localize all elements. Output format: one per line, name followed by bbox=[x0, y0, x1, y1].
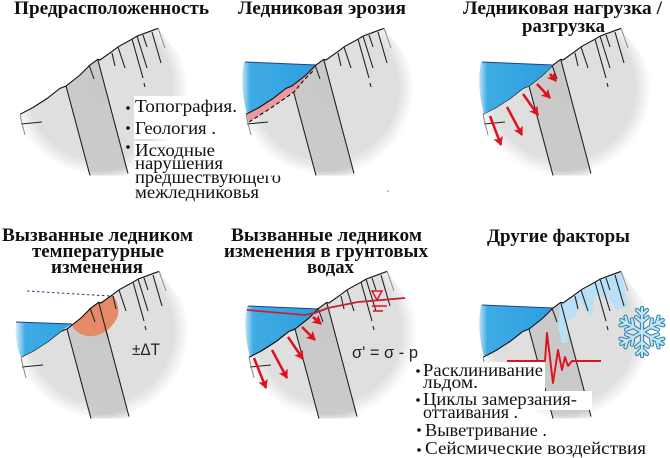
bullet list: other factors bbox=[416, 360, 646, 458]
title: temperature changes: изменения bbox=[51, 258, 143, 278]
panel: glacial erosion bbox=[238, 0, 416, 180]
panel: predisposition bbox=[14, 0, 281, 202]
slope diagram: groundwater changes bbox=[245, 271, 419, 423]
slope diagram: glacial erosion bbox=[242, 28, 416, 180]
panel: glacial loading bbox=[463, 0, 663, 180]
bullet list: predisposition: Геология . bbox=[135, 118, 216, 138]
bullet list: other factors: Циклы замерзания- bbox=[423, 389, 577, 409]
bullet list: other factors: Расклинивание bbox=[423, 360, 543, 380]
bullet list: predisposition: нарушения bbox=[135, 153, 223, 173]
text background patches bbox=[415, 362, 592, 420]
panel: temperature changes bbox=[2, 226, 193, 423]
bullet list: predisposition: Исходные bbox=[135, 140, 215, 160]
dotted former ice surface bbox=[27, 291, 110, 296]
text background patches bbox=[134, 96, 240, 200]
icon: snowflake bbox=[618, 308, 666, 356]
red stress arrows bbox=[490, 74, 556, 145]
bullet list: predisposition: межледниковья bbox=[135, 182, 259, 202]
slope diagram: glacial loading bbox=[479, 28, 653, 180]
title: glacial loading: разгрузка bbox=[522, 17, 605, 37]
panel: groundwater changes bbox=[224, 226, 429, 423]
bullet list: predisposition: Топография. bbox=[135, 96, 237, 116]
title: other factors: Другие факторы bbox=[487, 227, 630, 247]
title: temperature changes: Вызванные ледником bbox=[2, 226, 193, 246]
slope fractures bbox=[483, 271, 628, 418]
label: effective stress equation: σ' = σ - p bbox=[352, 343, 418, 362]
red stress arrows bbox=[254, 317, 321, 388]
water table line bbox=[247, 298, 405, 315]
frost zone bbox=[558, 271, 628, 343]
title: groundwater changes: изменения в грунтовых bbox=[224, 242, 429, 262]
panel: other factors bbox=[415, 227, 666, 458]
slope diagram: temperature changes bbox=[16, 271, 191, 423]
slope diagram: predisposition bbox=[20, 28, 190, 180]
bullet list: other factors: льдом. bbox=[423, 372, 478, 392]
title: groundwater changes: водах bbox=[307, 258, 355, 278]
bullet list: other factors: оттаивания . bbox=[423, 402, 518, 422]
bullet list: other factors: Сейсмические воздействия bbox=[425, 438, 646, 458]
title: groundwater changes bbox=[224, 226, 429, 278]
bullet list: predisposition bbox=[126, 96, 281, 202]
water table symbol bbox=[372, 291, 387, 311]
bullet list: predisposition: предшествующего bbox=[135, 167, 281, 187]
label: delta T: ±ΔT bbox=[132, 340, 160, 359]
title: glacial loading bbox=[463, 0, 663, 37]
title: temperature changes bbox=[2, 226, 193, 278]
title: temperature changes: температурные bbox=[32, 242, 164, 262]
slope diagram base: other factors bbox=[479, 271, 653, 423]
seismogram bbox=[507, 333, 601, 383]
bullet list: other factors: Выветривание . bbox=[425, 420, 547, 440]
title: groundwater changes: Вызванные ледником bbox=[231, 226, 422, 246]
